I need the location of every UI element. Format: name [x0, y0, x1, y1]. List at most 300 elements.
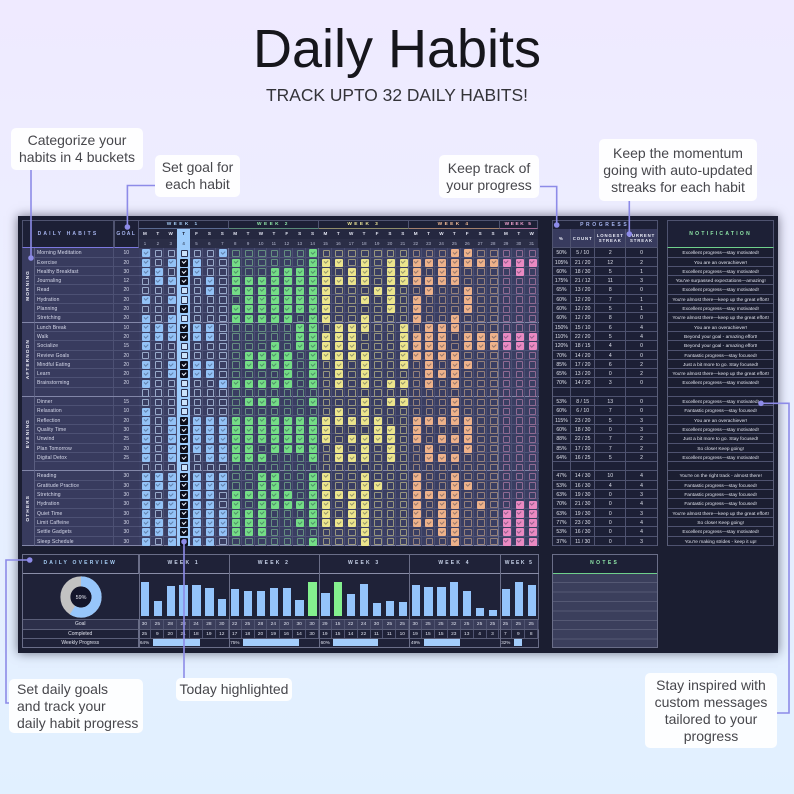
- progress rows: 19 / 30: [575, 511, 590, 517]
- day numbers: 8: [234, 241, 236, 246]
- day numbers: 6: [208, 241, 211, 246]
- label: goal: Goal: [75, 621, 86, 627]
- progress rows: 22 / 25: [575, 436, 590, 442]
- callout: today highlighted: [176, 678, 292, 701]
- day numbers: 13: [297, 241, 302, 246]
- callout: stay inspired: custom messages: [655, 694, 767, 710]
- progress rows: 6: [609, 362, 612, 368]
- day numbers: 11: [272, 241, 276, 246]
- weekday letters: W: [529, 231, 534, 236]
- progress rows: 110%: [555, 334, 568, 340]
- progress rows: 12: [607, 260, 613, 266]
- progress rows: 4: [640, 334, 643, 340]
- callout: categorize: habits in 4 buckets: [19, 149, 135, 165]
- day numbers: 3: [170, 241, 172, 246]
- notification rows: Excellent progress—stay motivated!: [682, 288, 759, 293]
- progress rows: 1: [640, 297, 643, 303]
- day numbers: 10: [259, 241, 263, 246]
- progress rows: 4: [640, 520, 643, 526]
- progress rows: 63%: [556, 492, 567, 498]
- completed values: 25: [142, 632, 147, 637]
- habit names and goals: 20: [123, 353, 129, 359]
- progress rows: 17 / 20: [575, 362, 590, 368]
- goal values: 25: [438, 622, 444, 627]
- progress rows: 53%: [556, 399, 567, 405]
- completed values: 17: [232, 632, 237, 637]
- progress rows: 6: [609, 325, 612, 331]
- callout: stay inspired: tailored to your: [665, 710, 757, 726]
- weekday letters: T: [363, 231, 365, 236]
- bar: week 4: [424, 639, 460, 646]
- weekday letters: S: [298, 231, 301, 236]
- progress rows: 4: [640, 483, 643, 489]
- progress rows: 4: [640, 501, 643, 507]
- day numbers: 26: [465, 241, 470, 246]
- progress rows: 8: [609, 315, 612, 321]
- progress rows: 4: [609, 353, 612, 359]
- weekday letters: T: [247, 231, 249, 236]
- progress rows: 6 / 10: [576, 408, 589, 414]
- progress rows: 0: [640, 408, 643, 414]
- habit names and goals: Exercise: [37, 260, 57, 266]
- habit names and goals: 10: [123, 325, 129, 331]
- habit names and goals: Stretching: [37, 315, 61, 321]
- column headers: LONGEST: [597, 233, 624, 238]
- progress rows: 22 / 20: [575, 334, 590, 340]
- overview week headers: WEEK 3: [348, 560, 380, 566]
- habit names and goals: 30: [123, 427, 129, 433]
- goal values: 25: [490, 622, 495, 627]
- progress rows: 5: [609, 455, 612, 461]
- progress rows: 60%: [556, 297, 567, 303]
- callout: stay inspired: Stay inspired with: [656, 676, 766, 692]
- weekday letters: S: [401, 231, 404, 236]
- weekday letters: S: [208, 231, 211, 236]
- completed values: 19: [271, 632, 276, 637]
- habit names and goals: Stretching: [37, 492, 61, 498]
- callout: streaks: going with auto-updated: [603, 162, 753, 178]
- progress rows: 0: [609, 371, 612, 377]
- progress rows: 0: [640, 287, 643, 293]
- day numbers: 7: [221, 241, 224, 246]
- day numbers: 22: [413, 241, 418, 246]
- callout: keep track: your progress: [446, 176, 532, 192]
- weekly progress: week 5: 32%: [501, 640, 510, 645]
- habit names and goals: 20: [123, 297, 129, 303]
- habit names and goals: 20: [123, 287, 129, 293]
- goal values: 32: [451, 622, 456, 627]
- weekday letters: M: [414, 231, 418, 236]
- bar: week 1: [153, 639, 200, 646]
- habit names and goals: Gratitude Practice: [37, 483, 79, 489]
- label: weekly progress: Weekly Progress: [61, 640, 99, 646]
- habit names and goals: 20: [123, 362, 129, 368]
- progress rows: 4: [640, 473, 643, 479]
- progress rows: 0: [609, 511, 612, 517]
- weekday letters: W: [169, 231, 173, 236]
- completed values: 19: [206, 632, 212, 637]
- habit names and goals: Digital Detox: [37, 455, 67, 461]
- habit names and goals: 20: [123, 418, 129, 424]
- progress rows: 70%: [556, 501, 567, 507]
- weekday letters: T: [182, 231, 185, 236]
- category: morning: MORNING: [26, 270, 30, 300]
- completed values: [138, 629, 538, 638]
- progress rows: 0: [609, 538, 612, 544]
- habit names and goals: 12: [123, 278, 129, 284]
- habit names and goals: 20: [123, 371, 129, 377]
- progress rows: 3: [640, 511, 643, 517]
- habit names and goals: 20: [123, 306, 129, 312]
- progress rows: 120%: [555, 343, 568, 349]
- habit names and goals: 20: [123, 260, 129, 266]
- notification rows: You are an overachiever!: [694, 261, 747, 266]
- completed values: 21: [180, 632, 186, 637]
- progress rows: 0: [640, 315, 643, 321]
- notification rows: You're on the right track - almost there!: [679, 474, 762, 479]
- goal values: 28: [168, 622, 173, 627]
- habit names and goals: Planning: [37, 306, 57, 312]
- category: afternoon: AFTERNOON: [26, 339, 30, 380]
- progress rows: 0: [640, 380, 643, 386]
- habit names and goals: 20: [123, 446, 129, 452]
- habit names and goals: 30: [123, 483, 129, 489]
- donut chart: 59%: [60, 576, 102, 618]
- callout: set goal: [155, 155, 240, 197]
- weekday letters: S: [491, 231, 495, 236]
- goal values: 25: [464, 622, 469, 627]
- panel: habit tracker dashboard: [18, 216, 778, 653]
- notification rows: Fantastic progress—stay focused!: [684, 354, 757, 359]
- callout: keep track: Keep track of: [448, 160, 530, 176]
- weekday letters: M: [504, 231, 508, 236]
- progress rows: 175%: [555, 278, 568, 284]
- habit names and goals: Unwind: [37, 436, 54, 442]
- progress rows: 13: [607, 399, 613, 405]
- notification rows: You are an overachiever!: [694, 419, 747, 424]
- panel: daily overview: [22, 554, 538, 648]
- progress rows: 2: [640, 446, 643, 452]
- goal values: 28: [180, 622, 186, 627]
- day numbers: 23: [426, 241, 431, 246]
- notification rows: Fantastic progress—stay focused!: [684, 484, 757, 489]
- label: goal: [23, 619, 138, 629]
- habit names and goals: 15: [123, 343, 129, 349]
- progress rows: 1: [640, 269, 643, 275]
- day numbers: 12: [284, 241, 289, 246]
- progress rows: 14 / 20: [575, 353, 590, 359]
- habit names and goals: 30: [123, 538, 129, 544]
- completed values: 11: [387, 632, 392, 637]
- notification rows: Beyond your goal - amazing effort!: [684, 335, 757, 340]
- completed values: 30: [309, 632, 315, 637]
- progress rows: 7: [609, 408, 612, 414]
- heading: daily habits: [22, 220, 114, 248]
- goal values: [138, 619, 538, 629]
- progress rows: 0: [609, 501, 612, 507]
- day numbers: 18: [362, 241, 367, 246]
- weekday letters: T: [272, 231, 275, 236]
- goal values: 25: [477, 622, 482, 627]
- progress rows: 19 / 30: [575, 492, 590, 498]
- day numbers: 25: [452, 241, 457, 246]
- column headers: %: [559, 236, 564, 241]
- habit names and goals: 25: [123, 455, 129, 461]
- progress rows: 21 / 30: [575, 501, 590, 507]
- weekday letters: F: [376, 231, 378, 236]
- progress rows: 0: [609, 529, 612, 535]
- goal values: 28: [258, 622, 263, 627]
- progress rows: 63%: [556, 511, 567, 517]
- progress rows: 105%: [555, 260, 568, 266]
- callout: daily goals: Set daily goals: [17, 680, 108, 696]
- progress rows: 8: [609, 287, 612, 293]
- progress rows: 3: [640, 492, 643, 498]
- progress rows: 14 / 30: [575, 473, 590, 479]
- completed values: 18: [245, 632, 250, 637]
- goal values: 25: [528, 622, 534, 627]
- progress rows: 18 / 30: [575, 427, 590, 433]
- progress rows: 12 / 20: [575, 306, 590, 312]
- checkbox grid: [138, 248, 538, 546]
- goal values: 24: [361, 622, 366, 627]
- goal values: 22: [348, 622, 353, 627]
- habit names and goals: 20: [123, 380, 129, 386]
- progress rows: 60%: [556, 315, 567, 321]
- habit names and goals: Morning Meditation: [37, 250, 82, 256]
- habit names and goals: Settle Gadgets: [37, 529, 72, 535]
- progress rows: 0: [609, 492, 612, 498]
- label: weekly progress: [23, 638, 138, 647]
- progress rows: 60%: [556, 427, 567, 433]
- progress rows: 13 / 20: [575, 371, 590, 377]
- habit names and goals: Review Goals: [37, 353, 69, 359]
- weekday letters: S: [479, 231, 482, 236]
- bar: week 5: [514, 639, 522, 646]
- day numbers: 14: [310, 241, 315, 246]
- weekday letters: M: [324, 231, 327, 236]
- week headers: WEEK 2: [257, 222, 290, 227]
- habit names and goals: Socialize: [37, 343, 58, 349]
- progress rows: 60%: [556, 408, 567, 414]
- progress rows: 3: [609, 380, 612, 386]
- progress rows: 21 / 12: [575, 278, 590, 284]
- column headers: CURRENT: [628, 233, 655, 238]
- progress rows: 13 / 20: [575, 287, 590, 293]
- completed values: 7: [504, 632, 507, 637]
- progress rows: 85%: [556, 446, 567, 452]
- habit names and goals: Quiet Time: [37, 511, 62, 517]
- category: afternoon: [22, 323, 35, 397]
- overview week headers: WEEK 4: [438, 560, 471, 566]
- progress rows: 60%: [556, 269, 567, 275]
- notification rows: Fantastic progress—stay focused!: [684, 502, 757, 507]
- progress rows: 3: [640, 538, 643, 544]
- progress rows: 64%: [556, 455, 567, 461]
- weekday letters: T: [453, 231, 456, 236]
- habit names and goals: 25: [123, 436, 129, 442]
- day numbers: 15: [323, 241, 328, 246]
- heading: progress: PROGRESS: [580, 222, 629, 228]
- progress rows: 5: [609, 334, 612, 340]
- notification rows: Excellent progress—stay motivated!: [682, 381, 759, 386]
- weekday letters: T: [517, 231, 520, 236]
- habit names and goals: 30: [123, 501, 129, 507]
- progress rows: 47%: [556, 473, 567, 479]
- progress rows: 70%: [556, 353, 567, 359]
- habit names and goals: Limit Caffeine: [37, 520, 69, 526]
- goal values: 25: [245, 622, 250, 627]
- heading: daily habits: DAILY HABITS: [38, 231, 98, 237]
- callout: streaks: streaks for each habit: [611, 178, 745, 194]
- progress rows: 85%: [556, 362, 567, 368]
- notification rows: Fantastic progress—stay focused!: [684, 493, 757, 498]
- progress rows: 50%: [556, 250, 567, 256]
- notification rows: Just a bit more to go. Stay focused!: [683, 437, 758, 442]
- notification rows: Excellent progress—stay motivated!: [682, 456, 759, 461]
- connector: today: [182, 540, 186, 678]
- callout: daily goals: daily habit progress: [17, 714, 138, 730]
- habit names and goals: Sleep Schedule: [37, 538, 74, 544]
- completed values: 16: [284, 632, 289, 637]
- day numbers: 19: [375, 241, 379, 246]
- callout: stay inspired: [645, 673, 777, 748]
- progress rows: 7: [609, 446, 612, 452]
- notification rows: Excellent progress—stay motivated!: [682, 428, 759, 433]
- heading: notes: NOTES: [590, 560, 619, 566]
- progress rows: 17 / 20: [575, 446, 590, 452]
- day numbers: 1: [144, 241, 146, 246]
- progress rows: 0: [640, 353, 643, 359]
- progress rows: 11 / 30: [575, 538, 590, 544]
- weekly progress: week 1: 64%: [140, 640, 149, 645]
- connector: daily overview: [6, 558, 32, 703]
- progress rows: 37%: [556, 538, 567, 544]
- progress rows: 2: [640, 371, 643, 377]
- day numbers: 2: [157, 241, 159, 246]
- goal values: 25: [155, 622, 160, 627]
- goal values: 20: [284, 622, 289, 627]
- weekday letters: S: [221, 231, 224, 236]
- goal values: 25: [503, 622, 508, 627]
- progress rows: 18 / 30: [575, 269, 590, 275]
- panel: notification messages: [667, 220, 774, 546]
- weekday letters: F: [285, 231, 288, 236]
- connector: goal: [125, 186, 155, 229]
- notification rows: You're making strides - keep it up!: [685, 540, 757, 544]
- completed values: 23: [451, 632, 456, 637]
- label: completed: Completed: [68, 631, 92, 637]
- callout: streaks: Keep the momentum: [613, 144, 743, 160]
- goal values: 24: [271, 622, 276, 627]
- day numbers: [139, 239, 538, 248]
- notification rows: Excellent progress—stay motivated!: [682, 530, 759, 535]
- completed values: 11: [374, 632, 379, 637]
- progress rows: 2: [609, 250, 612, 256]
- notification rows: You're almost there—keep up the great effort!: [672, 372, 769, 377]
- completed values: 4: [478, 632, 481, 637]
- goal values: 25: [400, 622, 405, 627]
- day numbers: 4: [182, 241, 185, 246]
- goal values: 24: [193, 622, 199, 627]
- progress rows: 53%: [556, 529, 567, 535]
- habit names and goals: 30: [123, 511, 129, 517]
- progress rows: 5: [609, 269, 612, 275]
- progress rows: 3: [640, 278, 643, 284]
- progress rows: 2: [640, 260, 643, 266]
- weekday letters: W: [259, 231, 263, 236]
- notification rows: [667, 248, 774, 546]
- progress rows: 10: [607, 473, 613, 479]
- habit names and goals: Lunch Break: [37, 325, 66, 331]
- progress rows: 23 / 20: [575, 418, 590, 424]
- progress rows: 8 / 15: [576, 399, 589, 405]
- weekday letters: T: [337, 231, 340, 236]
- goal values: 28: [206, 622, 212, 627]
- notification rows: So close! Keep going!: [697, 447, 744, 452]
- day numbers: 27: [478, 241, 483, 246]
- callout: daily goals: and track your: [17, 698, 106, 714]
- day numbers: 16: [336, 241, 341, 246]
- callout: set goal: each habit: [165, 176, 230, 192]
- heading: daily overview: [23, 555, 138, 574]
- progress rows: 2: [640, 436, 643, 442]
- progress rows: 0: [640, 250, 643, 256]
- habit names and goals: Walk: [37, 334, 48, 340]
- progress rows: 150%: [555, 325, 568, 331]
- week headers: WEEK 4: [438, 222, 470, 227]
- completed values: 12: [219, 632, 224, 637]
- progress rows: 7: [609, 297, 612, 303]
- heading: goal: [114, 220, 138, 248]
- habit names and goals: Hydration: [37, 501, 59, 507]
- progress rows: 16 / 30: [575, 529, 590, 535]
- week headers: WEEK 5: [505, 222, 533, 227]
- habit names and goals: Dinner: [37, 399, 52, 405]
- completed values: 8: [530, 632, 532, 637]
- panel: notes: [552, 554, 658, 648]
- habit names and goals: Quality Time: [37, 427, 66, 433]
- notification rows: Fantastic progress—stay focused!: [684, 409, 757, 414]
- completed values: 20: [168, 632, 173, 637]
- heading: progress: [552, 220, 658, 230]
- progress rows: 60%: [556, 306, 567, 312]
- progress rows: 0: [609, 520, 612, 526]
- notification rows: So close! Keep going!: [697, 521, 744, 526]
- weekday letters: S: [311, 231, 314, 236]
- completed values: 15: [438, 632, 444, 637]
- overview week headers: WEEK 5: [505, 560, 533, 566]
- goal values: 25: [516, 622, 521, 627]
- weekday letters: F: [466, 231, 469, 236]
- progress rows: 14 / 20: [575, 380, 590, 386]
- habit names and goals: Healthy Breakfast: [37, 269, 79, 275]
- bar: week 2: [243, 639, 299, 646]
- habit names and goals: 30: [123, 520, 129, 526]
- connector: notification: [759, 401, 789, 713]
- progress rows: 88%: [556, 436, 567, 442]
- progress rows: 4: [609, 483, 612, 489]
- notification rows: Excellent progress—stay motivated!: [682, 307, 759, 312]
- weekday letters: M: [143, 231, 147, 236]
- completed values: 22: [361, 632, 366, 637]
- connector: categorize: [29, 170, 33, 260]
- callout: categorize: [11, 128, 143, 170]
- label: completed: [23, 629, 138, 638]
- progress rows: 115%: [555, 418, 568, 424]
- heading: daily overview: DAILY OVERVIEW: [44, 560, 117, 566]
- weekday letters: [139, 229, 538, 239]
